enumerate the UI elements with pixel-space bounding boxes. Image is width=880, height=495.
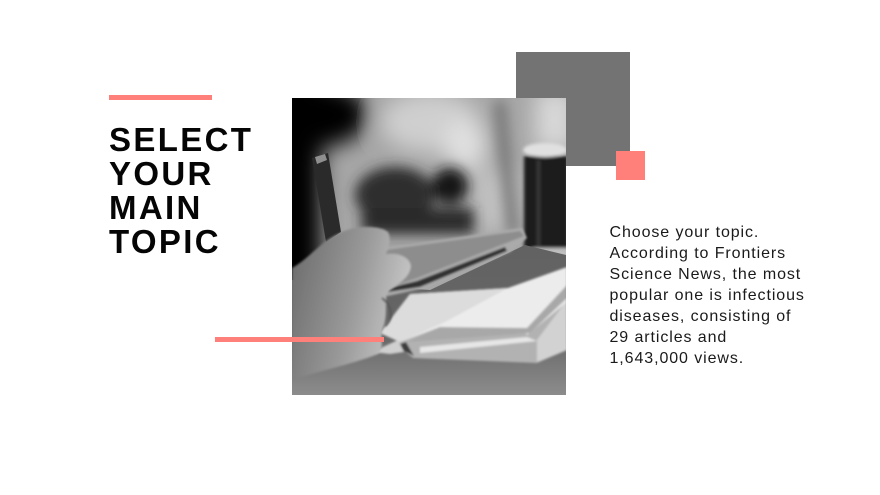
accent bar: above title (109, 95, 212, 100)
title: YOUR (109, 155, 214, 192)
body text (610, 224, 805, 367)
blurred background (292, 98, 566, 290)
notebook (372, 267, 567, 363)
accent square (616, 151, 645, 180)
body text: popular one is infectious (610, 287, 805, 304)
title: SELECT (109, 120, 253, 158)
grey square (516, 52, 630, 166)
body text: diseases, consisting of (610, 308, 791, 325)
body text: Science News, the most (610, 266, 801, 283)
body text: 1,643,000 views. (610, 350, 744, 367)
table (292, 245, 566, 395)
pen (312, 153, 341, 242)
body text: Choose your topic. (610, 224, 759, 241)
photo: hand writing in notebook (292, 98, 566, 395)
tablet (370, 228, 527, 296)
body text: 29 articles and (610, 329, 727, 346)
hand (292, 227, 411, 380)
accent bar: across photo (215, 337, 384, 342)
title: TOPIC (109, 223, 221, 260)
title (109, 120, 253, 260)
jar (523, 143, 570, 257)
body text: According to Frontiers (610, 245, 786, 262)
title: MAIN (109, 189, 203, 226)
